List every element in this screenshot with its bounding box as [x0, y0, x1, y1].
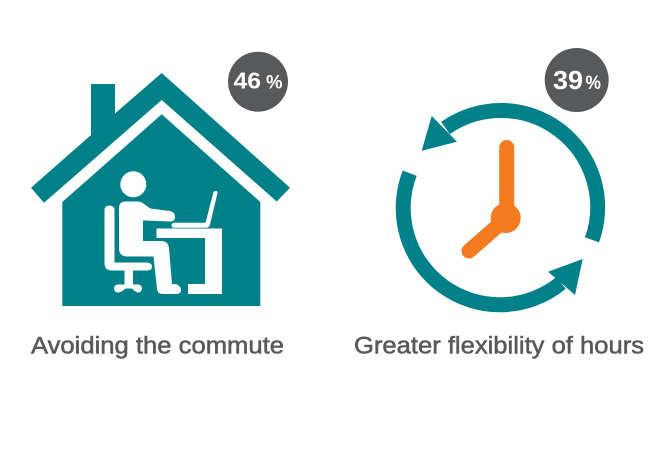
icon: circular arrows: [403, 111, 598, 305]
label: avoiding the commute: Avoiding the commute: [31, 332, 284, 359]
badge: 39 percent: [545, 48, 609, 112]
label: greater flexibility of hours: Greater flexibility of hours: [354, 332, 644, 359]
desk: [156, 228, 222, 294]
icon: clock hands: [469, 148, 521, 251]
panel: greater flexibility of hours: [354, 48, 644, 359]
icon: house roof with chimney: [31, 73, 290, 203]
laptop: [172, 191, 218, 228]
chair back and seat: [104, 206, 152, 270]
icon: house body: [62, 114, 260, 306]
head: [120, 171, 146, 197]
badge: 39 percent: %: [586, 73, 601, 94]
badge: 46 percent: 46: [234, 67, 261, 93]
badge: 39 percent: 39: [553, 65, 583, 95]
badge: 46 percent: [228, 52, 288, 112]
arrow: lower arc: [403, 173, 583, 305]
chair post and casters: [114, 270, 142, 292]
badge: 46 percent: %: [266, 72, 283, 93]
icon: person working at laptop: [104, 171, 222, 294]
panel: avoiding the commute: [31, 52, 290, 359]
arrow: upper arc: [422, 111, 598, 240]
body and leg: [119, 202, 181, 294]
